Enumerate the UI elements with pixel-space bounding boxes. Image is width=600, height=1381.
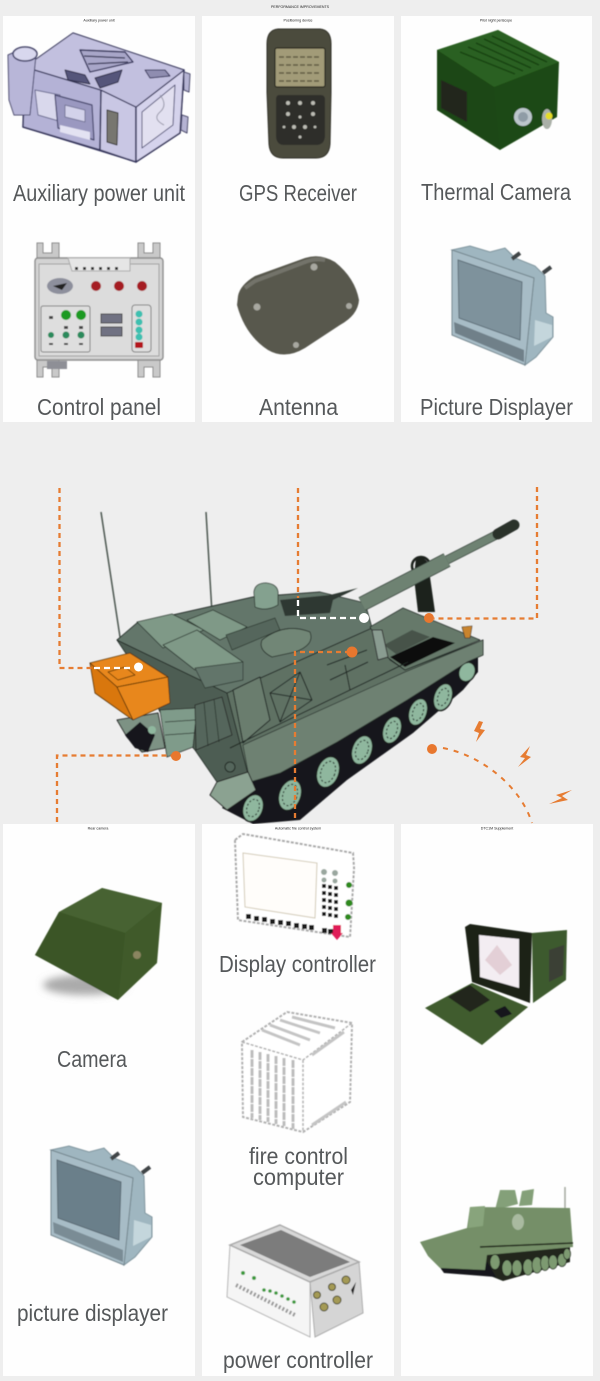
heading: automatic fire control system: Automatic fire control system <box>275 826 321 830</box>
icon: rugged laptop <box>425 924 567 1045</box>
cupola <box>254 583 278 609</box>
leader: rear camera <box>57 756 172 822</box>
icon: fire control computer <box>242 1012 352 1132</box>
front deck <box>370 608 480 670</box>
heading: DTC supplement: DTC1M Supplement <box>481 826 513 830</box>
title: PERFORMANCE IMPROVEMENTS <box>271 5 330 9</box>
antennas <box>101 512 217 697</box>
rear hull <box>117 640 250 782</box>
panel: thermal camera and picture displayer <box>401 16 592 422</box>
machine gun <box>280 588 358 616</box>
gun barrel <box>362 525 514 604</box>
icon: signal bolts <box>474 721 572 804</box>
label: picture displayer: picture displayer <box>17 1300 168 1326</box>
icon: GPS receiver <box>267 29 331 158</box>
label: picture displayer: Picture Displayer <box>420 394 573 420</box>
leader: GPS receiver <box>297 488 299 598</box>
label: antenna: Antenna <box>259 394 338 420</box>
heading: auxiliary power unit: Auxiliary power unit <box>83 18 115 22</box>
leader: white GPS segment <box>298 600 360 618</box>
panel: GPS receiver and antenna <box>202 16 394 422</box>
side hull <box>227 628 483 782</box>
label: auxiliary power unit: Auxiliary power unit <box>13 180 186 206</box>
leader: auxiliary power unit <box>60 488 92 668</box>
icon: picture displayer <box>452 246 553 365</box>
heading: rear camera: Rear camera <box>88 826 108 830</box>
label: power controller: power controller <box>223 1347 373 1373</box>
fuel drums <box>160 708 197 757</box>
icon: auxiliary power unit <box>8 33 190 162</box>
heading: positioning device: Positioning device <box>284 18 312 22</box>
heading: pilot night periscope: Pilot night periscope <box>480 18 512 22</box>
tank illustration <box>90 512 514 825</box>
panel: auxiliary power unit and control panel <box>3 16 195 422</box>
icon: camera <box>35 888 162 1000</box>
icon: display controller <box>235 834 354 940</box>
icon: self-propelled howitzer <box>420 1187 573 1281</box>
track <box>222 655 478 824</box>
icon: picture displayer <box>51 1146 152 1265</box>
panel: rear camera <box>3 824 195 1376</box>
roof <box>117 592 372 693</box>
callout dots <box>134 613 437 761</box>
leader: white auxiliary segment <box>94 667 134 669</box>
leader: automatic fire control <box>295 652 350 822</box>
gun mount <box>414 557 435 612</box>
panel: automatic fire control system <box>202 824 394 1376</box>
callout leaders <box>57 487 537 823</box>
wheel hubs <box>244 687 451 819</box>
label: camera: Camera <box>57 1046 127 1072</box>
icon: control panel <box>35 243 163 377</box>
label: fire control computer <box>249 1143 348 1190</box>
label: fire control computer: fire control <box>249 1143 348 1169</box>
highlighted auxiliary power unit <box>90 653 170 720</box>
panel: DTC supplement <box>401 824 593 1376</box>
label: thermal camera: Thermal Camera <box>421 179 571 205</box>
roof bins <box>137 610 247 670</box>
label: fire control computer: computer <box>253 1164 344 1190</box>
leader: thermal camera <box>434 487 537 618</box>
icon: power controller <box>227 1225 363 1337</box>
icon: antenna <box>237 256 359 355</box>
label: control panel: Control panel <box>37 394 161 420</box>
icon: thermal camera <box>437 30 559 150</box>
road wheels <box>239 660 478 825</box>
label: GPS receiver: GPS Receiver <box>239 180 357 206</box>
side stowage <box>230 650 408 748</box>
leader: wireless arc <box>443 748 532 823</box>
sponson <box>210 772 256 810</box>
front light <box>462 626 472 638</box>
label: display controller: Display controller <box>219 951 376 977</box>
rear roller <box>117 713 165 752</box>
